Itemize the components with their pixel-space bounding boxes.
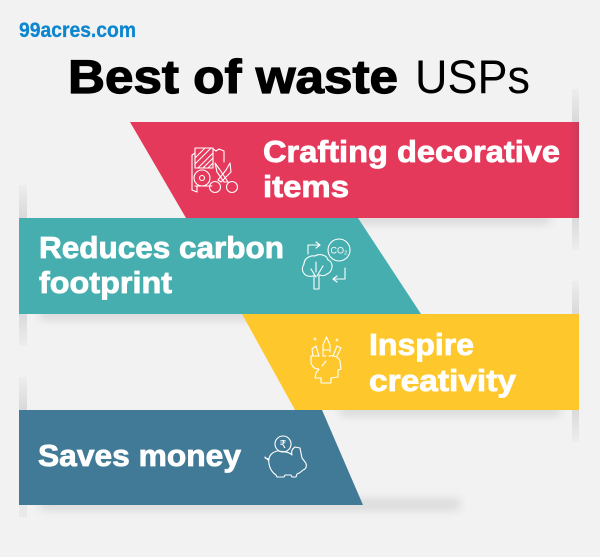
- text: Inspire creativity: Inspire: [369, 327, 474, 362]
- panel: crafting decorative items: [130, 122, 579, 218]
- text: Crafting decorative items: items: [263, 169, 349, 204]
- logo: 99acres.com: 99acres.com: [19, 18, 136, 42]
- text: Inspire creativity: creativity: [369, 363, 517, 398]
- text: Reduces carbon footprint: footprint: [39, 265, 172, 300]
- panel: saves money: [19, 410, 363, 505]
- panel: reduces carbon footprint: [19, 218, 421, 314]
- text: Crafting decorative items: Crafting decorative: [263, 134, 560, 169]
- title: Best of waste: [68, 50, 398, 103]
- panel: inspire creativity: [242, 314, 579, 410]
- text: Crafting decorative items: [263, 134, 560, 204]
- text: Saves money: Saves money: [38, 438, 242, 473]
- icon: head with creative tools: [311, 337, 341, 383]
- text: Reduces carbon footprint: Reduces carbon: [39, 230, 284, 265]
- icon: piggy bank with rupee coin: ₹: [280, 439, 286, 451]
- title: USPs: USPs: [415, 50, 530, 103]
- fold stripes and shadows: [19, 89, 579, 517]
- text: Inspire creativity: [369, 327, 517, 398]
- icon: tape and scissors: [192, 148, 238, 192]
- text: Reduces carbon footprint: [39, 230, 284, 300]
- icon: tree and CO2: [302, 239, 350, 289]
- icon: tree and CO2: CO₂: [330, 246, 348, 256]
- icon: piggy bank with rupee coin: [265, 436, 306, 477]
